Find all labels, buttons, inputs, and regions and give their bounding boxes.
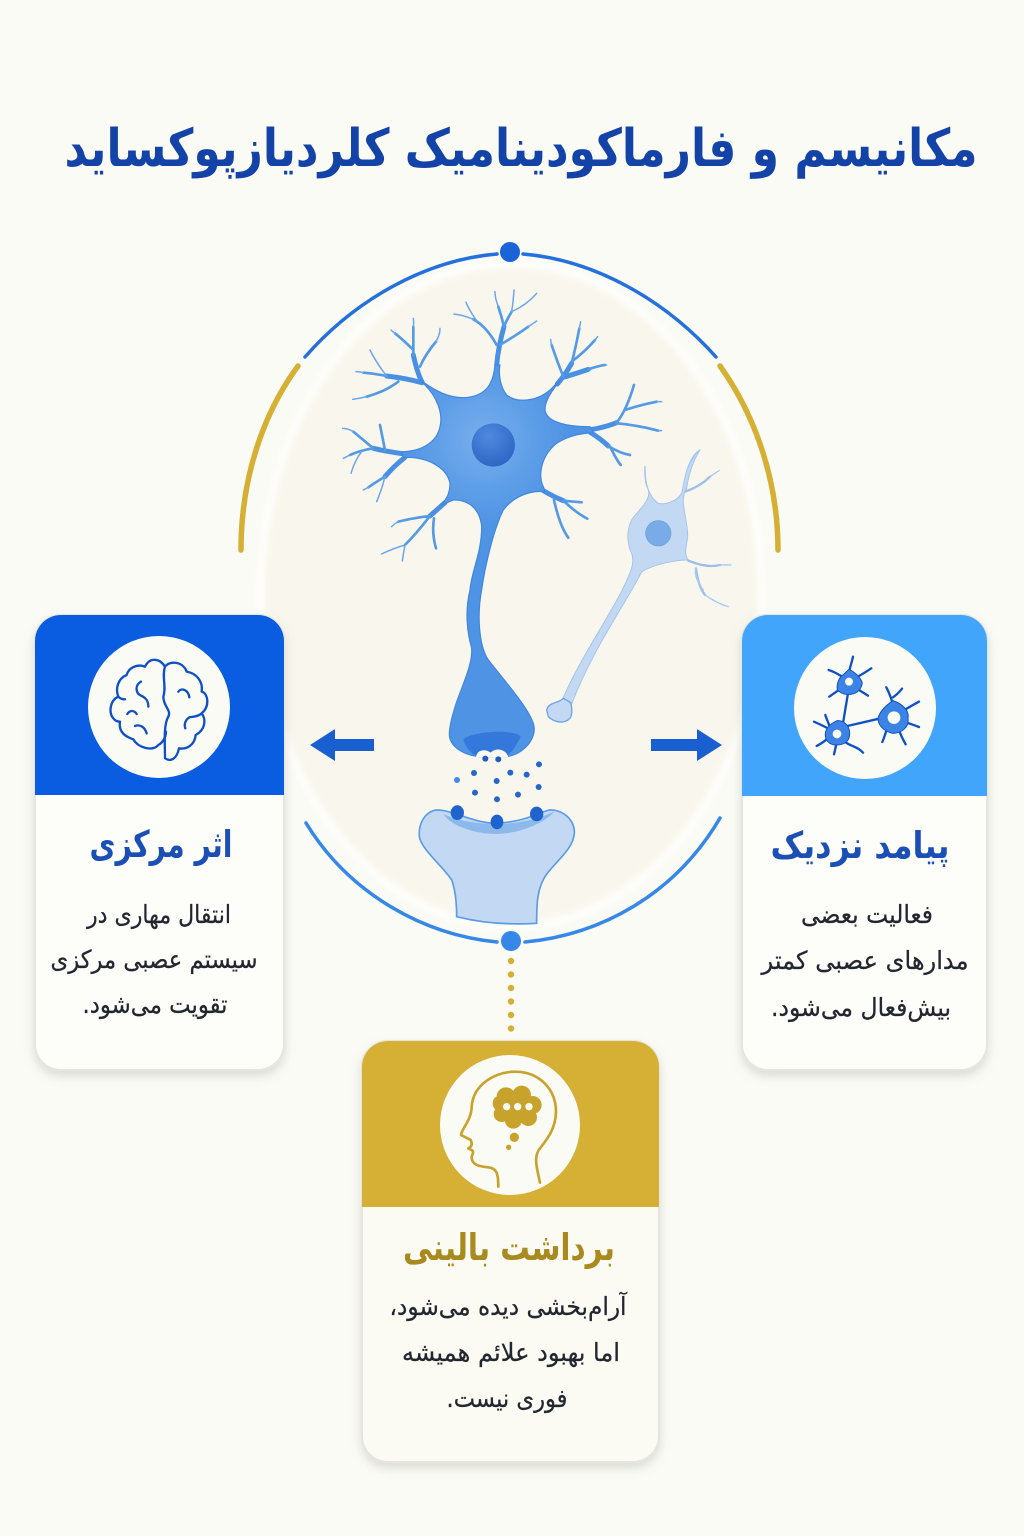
card header bottom (362, 1041, 659, 1207)
main neuron: soma, dendrites, axon and terminal (343, 290, 662, 757)
dotted connector to clinical card (508, 961, 514, 1032)
body text left: انتقال مهاری در (85, 900, 231, 930)
body text left: سیستم عصبی مرکزی (50, 945, 258, 975)
body text left (50, 900, 258, 1019)
heading left: اثر مرکزی (90, 823, 232, 866)
body text right: فعالیت بعضی (801, 900, 933, 929)
card header right (742, 615, 987, 796)
ring: segmented arcs around the neuron (241, 254, 778, 942)
panel: immediate outcome (742, 615, 987, 1070)
card body right (742, 615, 987, 1070)
icon circle: head with thought (440, 1055, 580, 1195)
panel: central effect (35, 615, 284, 1070)
card body bottom (362, 1041, 659, 1462)
body text bottom: آرام‌بخشی دیده می‌شود، (390, 1291, 627, 1321)
central oval backdrop (261, 264, 761, 926)
small pale neuron (547, 450, 731, 722)
body text left: تقویت می‌شود. (82, 990, 228, 1019)
card body left (35, 615, 284, 1070)
body text right: بیش‌فعال می‌شود. (771, 993, 951, 1022)
postsynaptic terminal with receptors (419, 805, 574, 924)
arrow: left (310, 729, 374, 761)
neurotransmitter vesicles (454, 756, 542, 802)
heading bottom: برداشت بالینی (403, 1226, 615, 1269)
heading right: پیامد نزدیک (770, 824, 950, 867)
arrow: right (651, 729, 722, 761)
body text right (760, 900, 968, 1022)
icon circle: neurons network (794, 637, 936, 779)
panel: clinical impression (362, 1041, 659, 1462)
ring top node (500, 242, 520, 262)
body text right: مدارهای عصبی کمتر (760, 946, 968, 975)
body text bottom: فوری نیست. (446, 1384, 568, 1413)
body text bottom: اما بهبود علائم همیشه (402, 1338, 620, 1368)
icon circle: brain (88, 636, 230, 778)
body text bottom (390, 1291, 627, 1413)
ring bottom node (501, 931, 521, 951)
card header left (35, 615, 284, 795)
